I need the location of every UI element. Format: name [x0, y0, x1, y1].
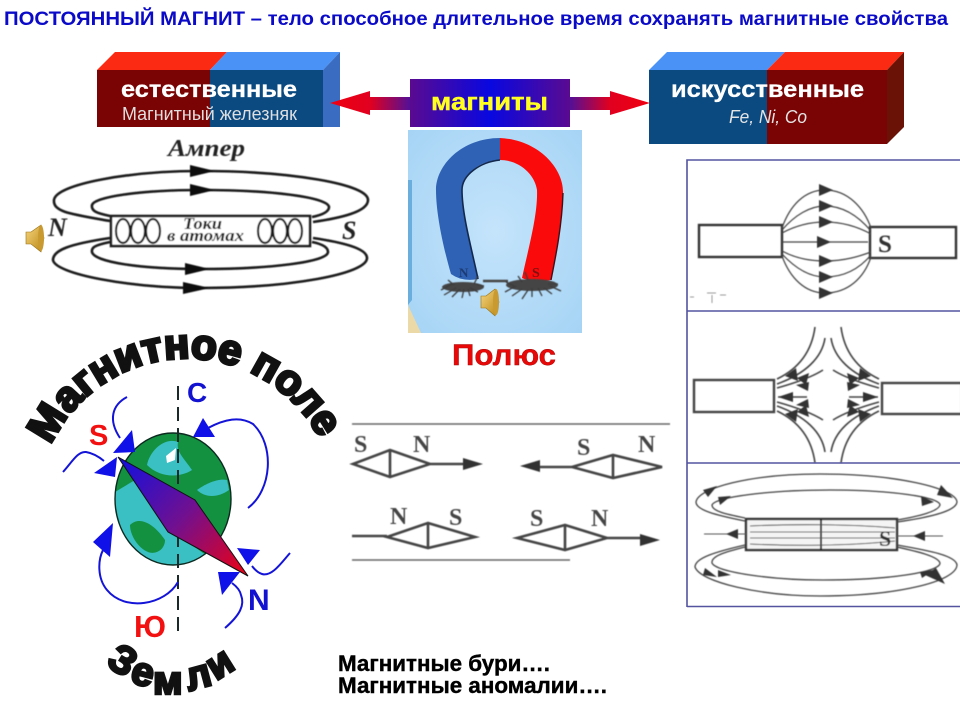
panel: field lines, unlike poles: [690, 184, 956, 303]
panel: compass needles: [352, 424, 670, 560]
panel: compass needles: S: [530, 506, 543, 532]
panel: compass needles: S: [354, 432, 367, 458]
diagram: Earth magnetic field: [24, 334, 337, 703]
diagram: Earth magnetic field: С: [187, 377, 207, 408]
panel: natural magnets block: Магнитный железняк: [122, 104, 297, 124]
diagram: Ampere atomic currents: S: [342, 216, 356, 245]
diagram: Ampere atomic currents: N: [47, 213, 68, 242]
panel: artificial magnets block: Fe, Ni, Co: [729, 107, 807, 127]
panel: field lines, like poles: [694, 327, 960, 463]
panel: field lines, unlike poles: S: [878, 231, 892, 258]
globe: [110, 433, 231, 572]
arrow: magnets to natural: [330, 91, 411, 115]
picture: horseshoe magnet: S: [532, 266, 540, 281]
panel: natural magnets block: естественные: [121, 76, 297, 102]
icon: speaker centre: [481, 289, 499, 316]
label: pole: Полюс: [452, 339, 556, 372]
text block: magnetic storms and anomalies: Магнитные аномалии….: [338, 673, 607, 698]
panel: artificial magnets block: [649, 52, 904, 144]
arrow: magnets to artificial: [569, 91, 650, 115]
panel: compass needles: N: [390, 504, 408, 530]
panel: compass needles: N: [638, 432, 656, 458]
heading: curved title: Магнитное поле: [24, 334, 337, 444]
diagram: Ampere atomic currents: Токи: [183, 214, 222, 233]
panel: artificial magnets block: искусственные: [671, 76, 864, 102]
diagram: Ampere atomic currents: в атомах: [167, 226, 245, 245]
diagram: Ampere atomic currents: Ампер: [166, 136, 245, 162]
diagram: Earth magnetic field: N: [248, 584, 270, 617]
panel: compass needles: S: [449, 505, 462, 531]
panel: field lines, bar magnet: [695, 474, 957, 596]
panel: compass needles: N: [413, 432, 431, 458]
diagram: Earth magnetic field: Ю: [134, 609, 166, 644]
panel: field lines, bar magnet: S: [879, 526, 891, 551]
pole letters: S: [89, 420, 108, 452]
title: ПОСТОЯННЫЙ МАГНИТ – тело способное длительное время сохранять магнитные свойства: [4, 8, 948, 30]
text block: magnetic storms and anomalies: [338, 651, 607, 698]
panel: compass needles: S: [577, 435, 590, 461]
panel: natural magnets block: [97, 52, 340, 127]
picture: horseshoe magnet: N: [459, 265, 469, 280]
diagram: Ampere atomic currents: [47, 136, 368, 294]
panel: compass needles: N: [591, 506, 609, 532]
heading: curved subtitle: Земли: [100, 635, 242, 703]
central label: magnets: магниты: [431, 89, 548, 116]
axis: [177, 386, 179, 633]
text block: magnetic storms and anomalies: Магнитные бури….: [338, 651, 550, 676]
compass needle: [118, 457, 248, 576]
panel borders: [687, 160, 960, 607]
iron filings: [441, 272, 561, 299]
icon: speaker left: [26, 225, 44, 252]
field arrows: [63, 397, 290, 628]
picture: horseshoe magnet: [408, 130, 582, 333]
central label: magnets: [410, 79, 570, 127]
